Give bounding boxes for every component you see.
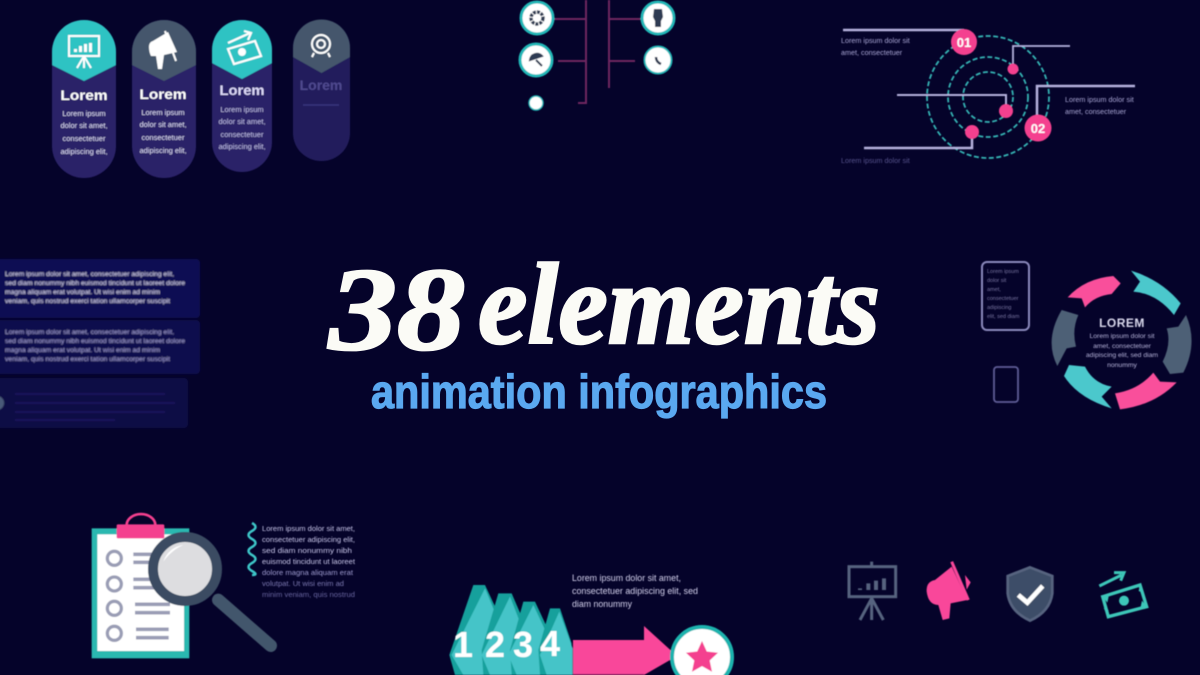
title (328, 241, 880, 375)
card 3: dolor sit amet, (218, 117, 266, 126)
card 3: Lorem (220, 82, 264, 98)
card 3: Lorem ipsum (220, 105, 264, 114)
ring text: amet, consectetuer (1093, 343, 1152, 350)
ring text: adipiscing elit, sed diam (1086, 352, 1158, 359)
teal number tabs (449, 585, 573, 675)
clipboard text: sed diam nonummy nibh (262, 546, 352, 555)
document icon: consectetuer (987, 296, 1019, 302)
ring heading: LOREM (1099, 316, 1145, 330)
text box 1 (0, 259, 200, 318)
node: umbrella (520, 44, 552, 76)
text box 2: Lorem ipsum dolor sit amet, consectetuer adipiscing elit, (5, 329, 174, 336)
node 02: 02 (1031, 121, 1045, 136)
arrow segments (1052, 271, 1192, 409)
clipboard (92, 514, 189, 658)
node 01: 01 (957, 35, 971, 50)
star badge (672, 627, 732, 675)
text box 1: magna aliquam erat volutpat. Ut wisi enim ad minim (5, 289, 160, 296)
text box 2: magna aliquam erat volutpat. Ut wisi enim ad minim (5, 347, 160, 354)
node 01 (951, 29, 977, 55)
text box 1: Lorem ipsum dolor sit amet, consectetuer adipiscing elit, (5, 271, 174, 278)
document icon: Lorem ipsum (987, 269, 1019, 275)
panel: document outlines (982, 262, 1029, 402)
text box 1: veniam, quis nostrud exerci tation ullamcorper suscipit (5, 298, 170, 305)
clipboard text: consectetuer adipiscing elit, (262, 535, 355, 544)
leader lines (843, 30, 1135, 148)
small nodes (965, 64, 1018, 139)
node 02 (1024, 114, 1052, 142)
step numbers: 4 (540, 623, 560, 664)
clipboard text: dolore magna aliquam erat (262, 568, 354, 577)
card 1: dolor sit amet, (60, 121, 108, 130)
clipboard text: Lorem ipsum dolor sit amet, (262, 524, 355, 533)
panel: clipboard and magnifier (92, 514, 356, 658)
document icon: adipiscing (987, 305, 1011, 311)
card 1 (52, 20, 116, 178)
wavy accent (248, 523, 256, 575)
document icon: amet, (987, 287, 1001, 293)
node: gear (521, 2, 553, 34)
card 4 (293, 20, 350, 161)
step text: Lorem ipsum dolor sit amet, (572, 573, 681, 583)
document icon: dolor sit (987, 278, 1007, 284)
step text (572, 573, 698, 609)
panel: connected icon nodes (520, 0, 674, 110)
tablet icon (994, 367, 1018, 402)
title: elements (478, 241, 880, 369)
panel: cycle ring (1052, 271, 1192, 409)
panel: text boxes left (0, 259, 200, 428)
pink arrow (573, 626, 677, 675)
document icon: elit, sed diam (987, 314, 1020, 320)
title: 38 (328, 244, 465, 375)
panel: bottom icon row (849, 562, 1147, 621)
dashed orbits (927, 36, 1049, 158)
card 3 (212, 20, 272, 172)
card 2 (132, 20, 196, 178)
step text: diam nonummy (572, 599, 633, 609)
orbit labels (841, 36, 1134, 165)
ring text: nonummy (1107, 362, 1138, 369)
orbit labels: amet, consectetuer (841, 48, 903, 57)
icon: shield (1008, 567, 1052, 621)
text box 2: sed diam nonummy nibh euismod tincidunt ut laoreet dolore (5, 338, 185, 345)
card 3: adipiscing elit, (218, 142, 266, 151)
document icon (982, 262, 1029, 330)
card 4: Lorem (300, 77, 342, 93)
card 1: Lorem (60, 87, 108, 103)
orbit labels: amet, consectetuer (1065, 107, 1127, 116)
node: phone (644, 46, 672, 74)
card 3: consectetuer (221, 130, 264, 139)
step numbers: 3 (513, 624, 533, 665)
orbit labels: Lorem ipsum dolor sit (841, 36, 910, 45)
card 2: consectetuer (142, 133, 185, 142)
connector lines (554, 0, 641, 103)
card 2: Lorem ipsum (141, 108, 185, 117)
step numbers: 1 (453, 624, 473, 665)
card 2: dolor sit amet, (139, 120, 187, 129)
clipboard text: euismod tincidunt ut laoreet (262, 557, 356, 566)
icon: money (1099, 573, 1147, 617)
card 1: adipiscing elit, (60, 147, 108, 156)
node: bulb (642, 2, 674, 34)
text box 2: veniam, quis nostrud exerci tation ullamcorper suscipit (5, 356, 170, 363)
text box 3 (0, 378, 188, 428)
node: dot (529, 96, 543, 110)
card 2: Lorem (140, 86, 186, 102)
clipboard text: minim veniam, quis nostrud (262, 590, 355, 599)
card 1: Lorem ipsum (62, 109, 106, 118)
panel: orbit diagram (841, 29, 1135, 165)
panel: numbered steps with arrow (449, 573, 732, 675)
clipboard text (262, 524, 356, 599)
icon: megaphone (927, 562, 971, 620)
orbit labels: Lorem ipsum dolor sit (841, 156, 910, 165)
orbit labels: Lorem ipsum dolor sit (1065, 95, 1134, 104)
step numbers: 2 (485, 624, 505, 665)
step numbers (453, 623, 560, 665)
ring text (1086, 333, 1158, 369)
text box 1: sed diam nonummy nibh euismod tincidunt ut laoreet dolore (5, 280, 185, 287)
step text: consectetuer adipiscing elit, sed (572, 586, 698, 596)
card 2: adipiscing elit, (139, 146, 187, 155)
magnifier (153, 537, 271, 646)
text box 2 (0, 320, 200, 374)
icon: presentation board (849, 562, 896, 620)
card 1: consectetuer (63, 134, 106, 143)
subtitle: animation infographics (371, 365, 827, 418)
clipboard text: volutpat. Ut wisi enim ad (262, 579, 344, 588)
ring text: Lorem ipsum dolor sit (1090, 333, 1155, 340)
panel: pill cards (52, 20, 350, 178)
